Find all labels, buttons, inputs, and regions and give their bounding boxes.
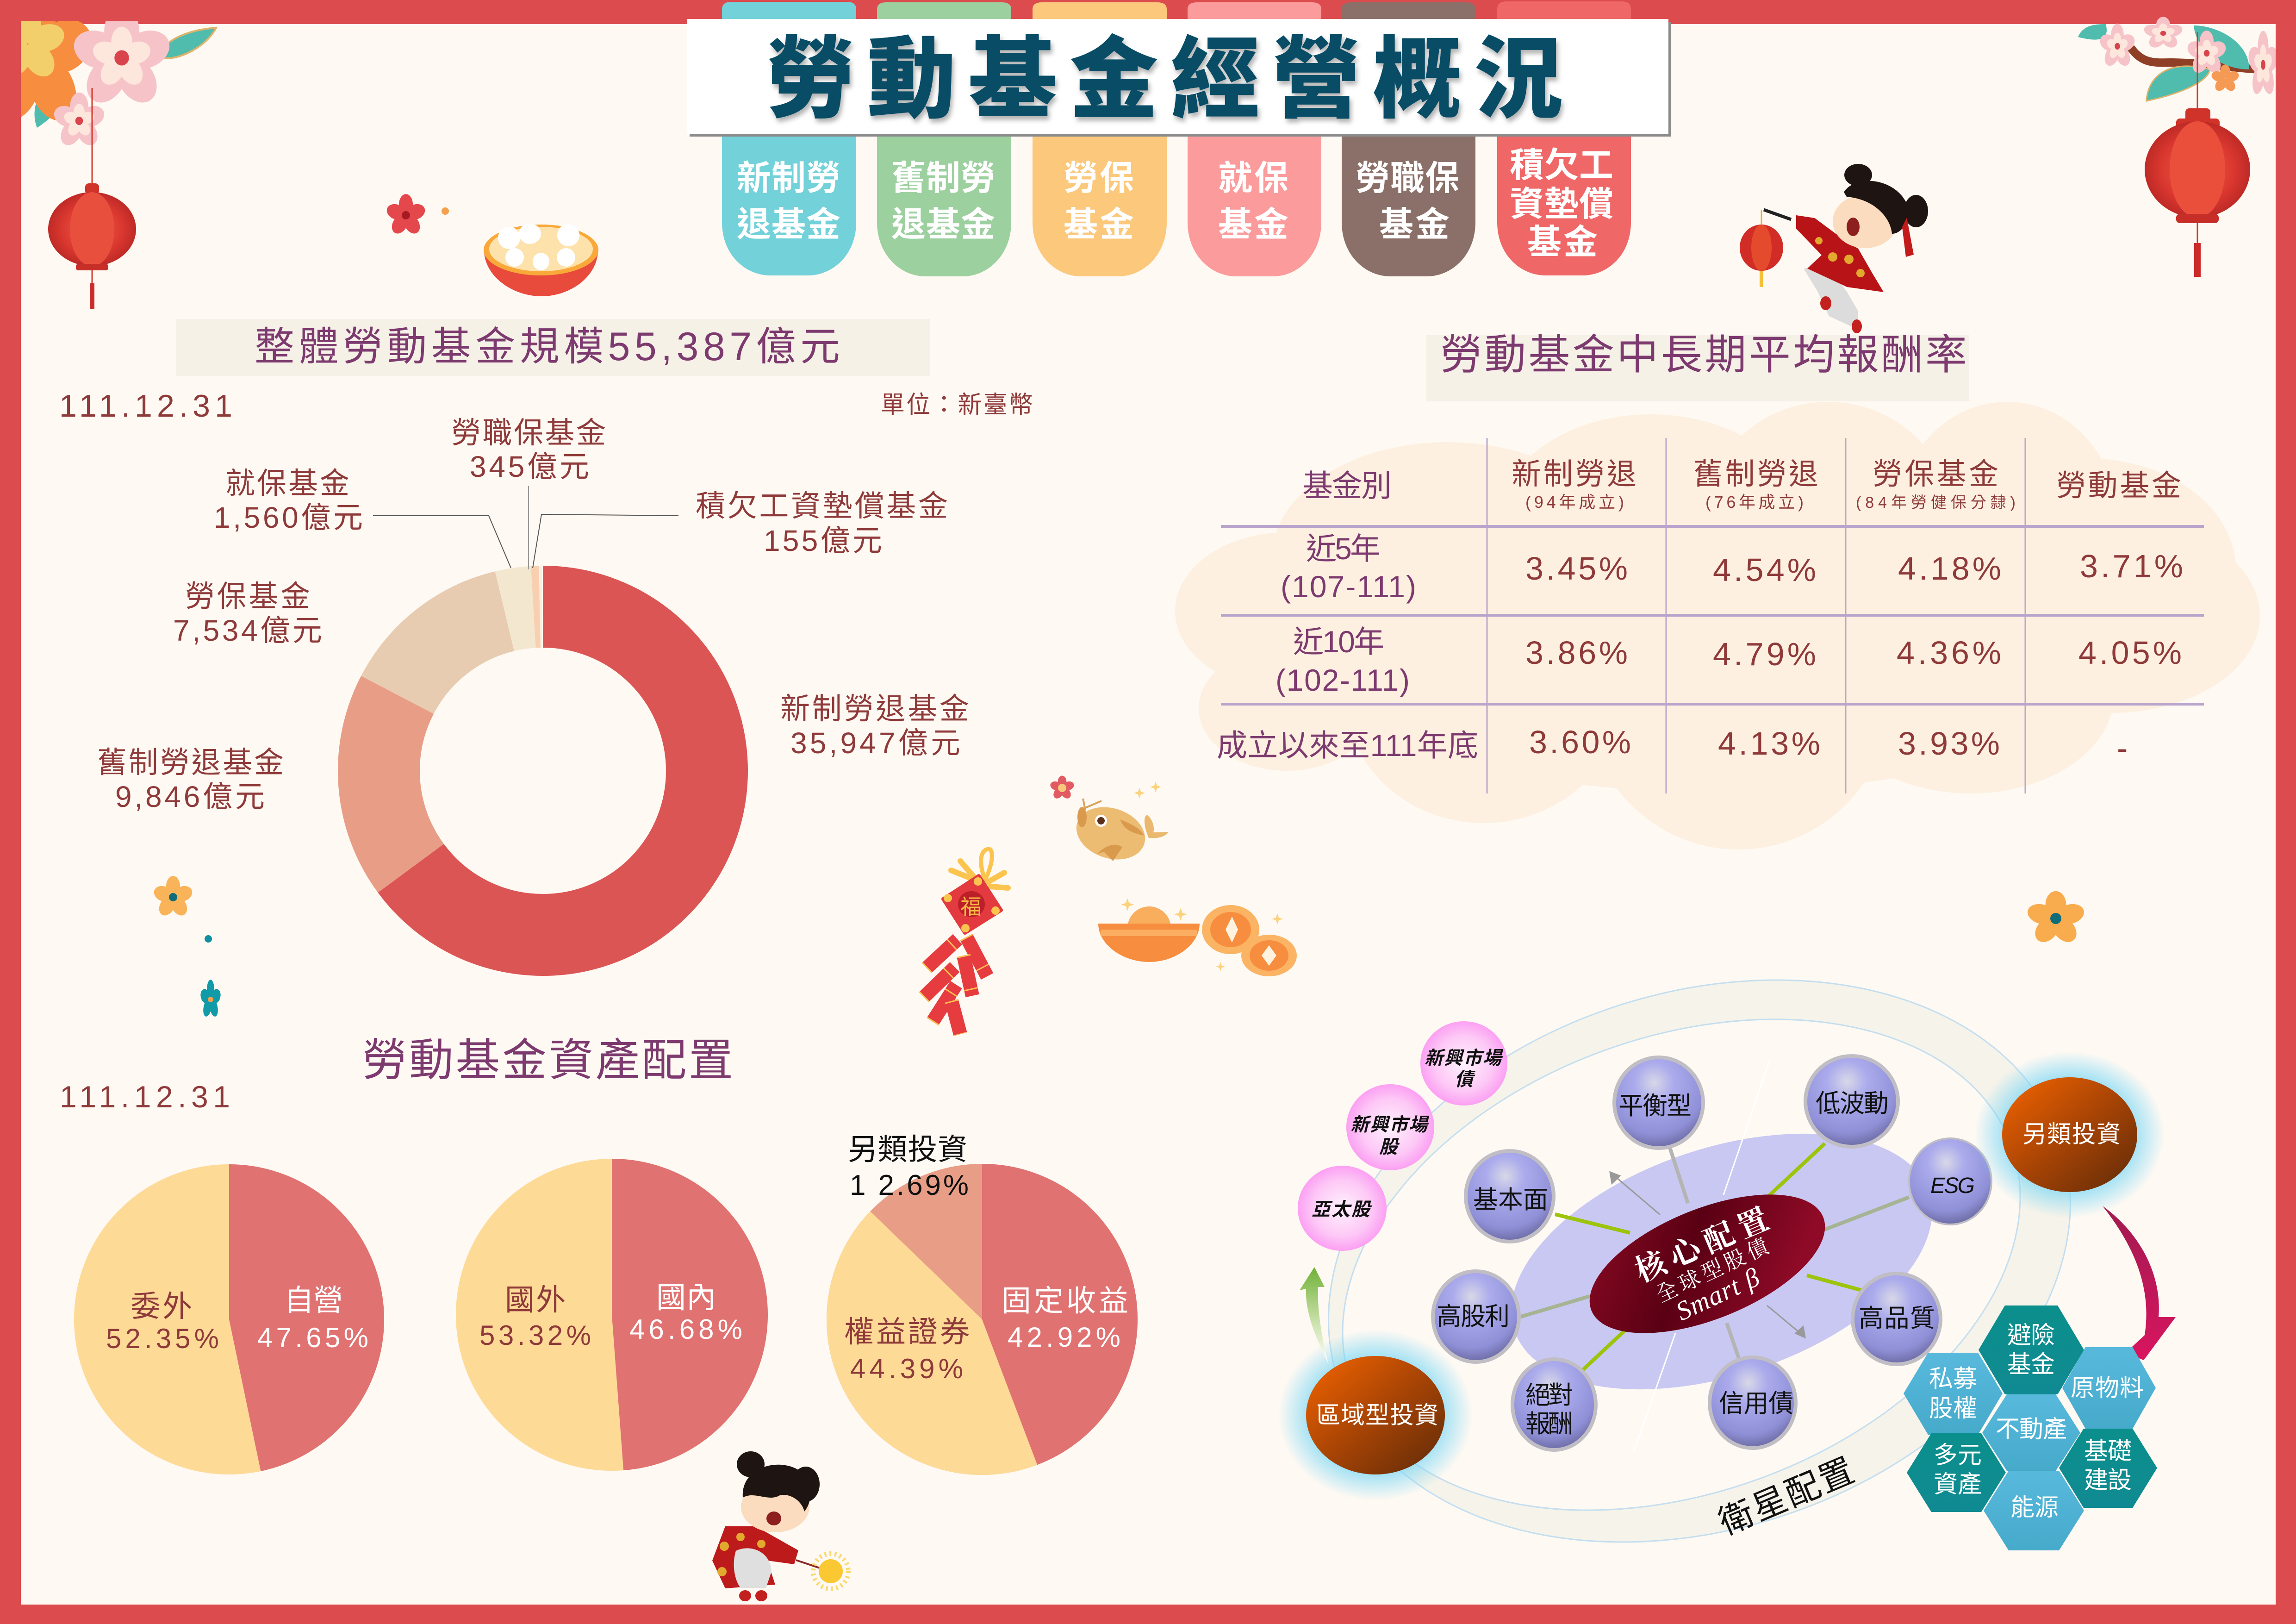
row: since inception: 成立以來至111年底	[1217, 728, 1478, 762]
row: since inception: 4.13%	[1718, 725, 1820, 762]
tab: 積欠工資墊償基金: 資墊償	[1510, 185, 1613, 223]
sphere: 信用債	[1710, 1357, 1796, 1448]
sphere: 低波動	[1805, 1056, 1898, 1147]
heading: asset allocation: 勞動基金資產配置	[362, 1036, 733, 1085]
row: 近10年	[1276, 625, 2182, 697]
sphere: 基本面	[1466, 1151, 1554, 1242]
decoration: firecracker	[924, 849, 1008, 1034]
heading: fund size	[176, 319, 930, 376]
tab: 勞職保基金	[1342, 2, 1475, 276]
pie labels: 國內 國外: 53.32%	[479, 1320, 591, 1351]
cloud backdrop	[1175, 402, 2260, 849]
pie chart: asset classes	[904, 1242, 1060, 1397]
pie labels: asset classes: 1 2.69%	[850, 1169, 969, 1201]
core ellipse: Smart β	[1671, 1262, 1764, 1326]
tab: 勞保基金: 勞保	[1064, 159, 1134, 197]
tab: 就保基金: 基金	[1218, 205, 1288, 244]
hexagon: 私募股權: 股權	[1929, 1395, 1977, 1422]
sphere: 新興市場股: 新興市場	[1350, 1115, 1430, 1135]
core ellipse: 全球型股債	[1652, 1234, 1773, 1307]
decoration: girl with lantern	[1740, 164, 1928, 333]
tab: 積欠工資墊償基金	[1497, 1, 1631, 275]
row: 近5年: 3.71%	[2080, 548, 2183, 584]
sphere: 高股利	[1433, 1271, 1519, 1362]
row: 近5年: 4.54%	[1713, 552, 1816, 588]
tab: 勞職保基金: 基金	[1379, 205, 1450, 244]
hexagon: 避險基金: 基金	[2007, 1351, 2055, 1378]
donut label: 勞職保基金	[451, 416, 606, 483]
sphere: 低波動: 低波動	[1816, 1090, 1889, 1118]
row: since inception: 3.60%	[1529, 724, 1631, 760]
row: 近5年: 4.18%	[1898, 550, 2001, 587]
tab: 勞職保基金: 勞職保	[1356, 159, 1459, 197]
donut label: 舊制勞退基金: 9,846億元	[115, 780, 265, 813]
decoration: koi fish	[1049, 775, 1169, 868]
glow and ball: 區域型投資	[1278, 1330, 1473, 1501]
row: 近10年: 4.79%	[1713, 636, 1816, 672]
pie labels: asset classes: 權益證券	[844, 1315, 970, 1349]
table header row	[1302, 457, 2181, 512]
core ellipse: 核心配置	[1630, 1202, 1774, 1289]
sphere: 信用債: 信用債	[1719, 1390, 1793, 1418]
sphere: 絕對報酬: 絕對	[1525, 1381, 1573, 1409]
hexagon: 私募股權: 私募	[1929, 1366, 1977, 1393]
hexagon: 基礎建設	[2059, 1429, 2157, 1508]
pie labels: 自營 委外: 47.65%	[257, 1322, 368, 1353]
sphere: 絕對報酬	[1512, 1359, 1596, 1450]
satellite ring	[1254, 887, 2145, 1624]
donut label: 勞保基金: 勞保基金	[185, 580, 310, 613]
title banner	[687, 19, 1671, 137]
table header row: 基金別	[1302, 468, 1392, 503]
table header row: (94年成立)	[1525, 493, 1624, 512]
sphere: 新興市場債: 債	[1455, 1069, 1476, 1090]
tab: 新制勞退基金: 退基金	[737, 205, 840, 244]
hexagon: 原物料: 原物料	[2071, 1375, 2144, 1402]
tab: 舊制勞退基金: 舊制勞	[891, 159, 995, 197]
hexagon: 原物料	[2062, 1347, 2156, 1429]
pie labels: 自營 委外: 委外	[131, 1290, 192, 1323]
tab: 舊制勞退基金	[877, 2, 1011, 276]
tab: 舊制勞退基金: 退基金	[891, 205, 995, 244]
donut label: 積欠工資墊償基金	[696, 489, 948, 557]
hexagon: 避險基金: 避險	[2007, 1322, 2055, 1349]
tab: 積欠工資墊償基金: 積欠工	[1510, 146, 1613, 184]
arrow: down-right	[1767, 1305, 1805, 1337]
donut label: 勞保基金: 7,534億元	[173, 614, 322, 647]
tab: 新制勞退基金	[722, 2, 856, 275]
diagram: core-satellite allocation	[1254, 887, 2176, 1624]
hexagon: 多元資產	[1907, 1433, 2006, 1512]
pie labels: asset classes	[844, 1133, 1128, 1384]
sphere: 平衡型	[1614, 1057, 1703, 1148]
row: since inception	[1217, 724, 2128, 766]
sphere: ESG: ESG	[1930, 1174, 1975, 1198]
heading: long-term returns: 勞動基金中長期平均報酬率	[1440, 332, 1967, 378]
hexagon: 多元資產: 資產	[1934, 1471, 1982, 1498]
hexagon: 基礎建設: 建設	[2084, 1467, 2132, 1494]
pie labels: asset classes: 另類投資	[848, 1133, 967, 1166]
unit note: 單位：新臺幣	[881, 392, 1033, 418]
row: 近10年: 近10年	[1293, 625, 1384, 659]
core halo	[1479, 1085, 1965, 1438]
hexagon: 多元資產: 多元	[1934, 1442, 1982, 1469]
sphere: 新興市場股: 股	[1379, 1137, 1400, 1157]
sphere: 基本面: 基本面	[1473, 1186, 1548, 1214]
donut label: 新制勞退基金: 35,947億元	[790, 726, 960, 760]
table header row: (84年勞健保分隸)	[1856, 494, 2016, 512]
decoration: orange flower right	[2025, 891, 2087, 946]
date: asset allocation: 111.12.31	[60, 1080, 230, 1114]
donut label: 勞職保基金: 勞職保基金	[451, 416, 606, 450]
donut label: 舊制勞退基金	[97, 746, 284, 813]
donut label: 就保基金: 1,560億元	[214, 501, 363, 534]
donut label: 舊制勞退基金: 舊制勞退基金	[97, 746, 284, 779]
sphere: ESG	[1909, 1138, 1991, 1224]
sphere: 亞太股: 亞太股	[1312, 1199, 1372, 1220]
sphere: 高股利: 高股利	[1437, 1303, 1510, 1330]
table header row: 新制勞退	[1512, 457, 1636, 491]
pie labels: 自營 委外: 自營	[284, 1284, 343, 1317]
title banner: 勞動基金經營概況	[766, 30, 1563, 129]
row: since inception: 3.93%	[1898, 725, 2000, 762]
tab: 就保基金: 就保	[1218, 159, 1288, 197]
tab: 就保基金	[1188, 2, 1321, 276]
heading: long-term returns	[1426, 332, 1969, 401]
hexagon: 避險基金	[1979, 1305, 2084, 1394]
donut chart: fund size	[379, 606, 707, 935]
donut label: 積欠工資墊償基金: 積欠工資墊償基金	[696, 489, 948, 523]
decoration: top-right branch	[2078, 17, 2296, 157]
sphere: 新興市場債: 新興市場	[1425, 1048, 1504, 1068]
pie labels: 國內 國外	[479, 1281, 742, 1351]
connector lines	[1513, 1143, 1909, 1371]
pie labels: asset classes: 固定收益	[1002, 1284, 1128, 1318]
sphere: 新興市場股	[1346, 1084, 1434, 1170]
sphere: 高品質	[1853, 1274, 1941, 1364]
donut label: 勞保基金	[173, 580, 322, 647]
decoration: tangyuan bowl	[484, 224, 598, 296]
decoration: small flowers left	[152, 876, 222, 1020]
donut label: 就保基金	[214, 467, 363, 534]
row: 近10年: 4.36%	[1897, 635, 2001, 671]
donut label: 勞職保基金: 345億元	[470, 450, 589, 483]
decoration: girl with sparkler	[712, 1451, 848, 1601]
row: 近5年: 近5年	[1306, 531, 1381, 566]
pie labels: 國內 國外: 46.68%	[629, 1314, 742, 1345]
hexagon: 私募股權	[1904, 1353, 2003, 1435]
core ellipse	[1571, 1166, 1844, 1362]
table header row: (76年成立)	[1705, 493, 1804, 512]
arrow: up-left	[1610, 1172, 1660, 1215]
sphere: 高品質: 高品質	[1859, 1305, 1935, 1332]
decoration: gold ingot and coins	[1098, 898, 1297, 976]
row: 近10年: 4.05%	[2078, 635, 2182, 671]
date: fund size: 111.12.31	[59, 388, 232, 424]
donut leader lines	[373, 486, 678, 569]
tab: 勞保基金	[1033, 2, 1167, 276]
row: 近5年: 3.45%	[1525, 550, 1628, 587]
sphere: 新興市場債	[1420, 1021, 1507, 1106]
sphere: 亞太股	[1298, 1166, 1387, 1251]
donut label: 就保基金: 就保基金	[225, 467, 349, 500]
pie labels: 國內 國外: 國內	[656, 1281, 716, 1314]
tab: 積欠工資墊償基金: 基金	[1527, 223, 1598, 261]
sphere: 絕對報酬: 報酬	[1525, 1410, 1573, 1438]
tab: 新制勞退基金: 新制勞	[737, 159, 840, 197]
hexagon: 能源: 能源	[2010, 1494, 2059, 1521]
row: since inception: -	[2117, 730, 2128, 766]
pie chart: self-managed vs outsourced	[152, 1242, 306, 1397]
pie labels: asset classes: 42.92%	[1008, 1322, 1120, 1353]
returns table	[1217, 438, 2204, 793]
row: 近5年	[1281, 531, 2183, 604]
hexagon: 不動產	[1982, 1394, 2080, 1471]
hexagon: 基礎建設: 基礎	[2084, 1438, 2132, 1465]
arrow: green curve	[1300, 1267, 1328, 1363]
white axis lines	[1633, 1059, 1770, 1453]
hexagon: 能源	[1984, 1471, 2084, 1550]
decoration: top-left flowers	[0, 0, 222, 150]
row: 近5年: (107-111)	[1281, 569, 1416, 604]
hexagon: 不動產: 不動產	[1996, 1416, 2067, 1443]
pie labels: 國內 國外: 國外	[505, 1283, 566, 1317]
decoration: left lantern	[48, 88, 136, 309]
heading: fund size: 整體勞動基金規模55,387億元	[255, 325, 840, 369]
decoration: firecracker: 福	[960, 895, 982, 919]
table header row: 舊制勞退	[1693, 457, 1818, 491]
glow and ball: 區域型投資: 區域型投資	[1316, 1402, 1438, 1429]
donut label: 積欠工資墊償基金: 155億元	[764, 524, 882, 557]
label: 衛星配置: 衛星配置	[1713, 1451, 1860, 1542]
donut label: 新制勞退基金	[780, 692, 969, 760]
pie chart: domestic vs overseas	[534, 1237, 690, 1393]
donut label: 新制勞退基金: 新制勞退基金	[780, 692, 969, 725]
glow and ball: 另類投資	[1975, 1051, 2165, 1218]
row: 近10年: 3.86%	[1525, 635, 1628, 671]
pie labels: asset classes: 44.39%	[850, 1353, 963, 1384]
glow and ball: 另類投資: 另類投資	[2022, 1121, 2121, 1148]
decoration: red flower	[385, 194, 449, 237]
decoration: right lantern	[2145, 32, 2250, 277]
arrow: magenta curve	[2103, 1206, 2176, 1360]
row: 近10年: (102-111)	[1276, 663, 1410, 697]
sphere: 平衡型: 平衡型	[1618, 1092, 1692, 1120]
table header row: 勞動基金	[2056, 469, 2181, 502]
pie labels: 自營 委外	[106, 1284, 368, 1354]
table header row: 勞保基金	[1873, 457, 1998, 491]
tab: 勞保基金: 基金	[1064, 205, 1134, 244]
pie labels: 自營 委外: 52.35%	[106, 1323, 219, 1354]
